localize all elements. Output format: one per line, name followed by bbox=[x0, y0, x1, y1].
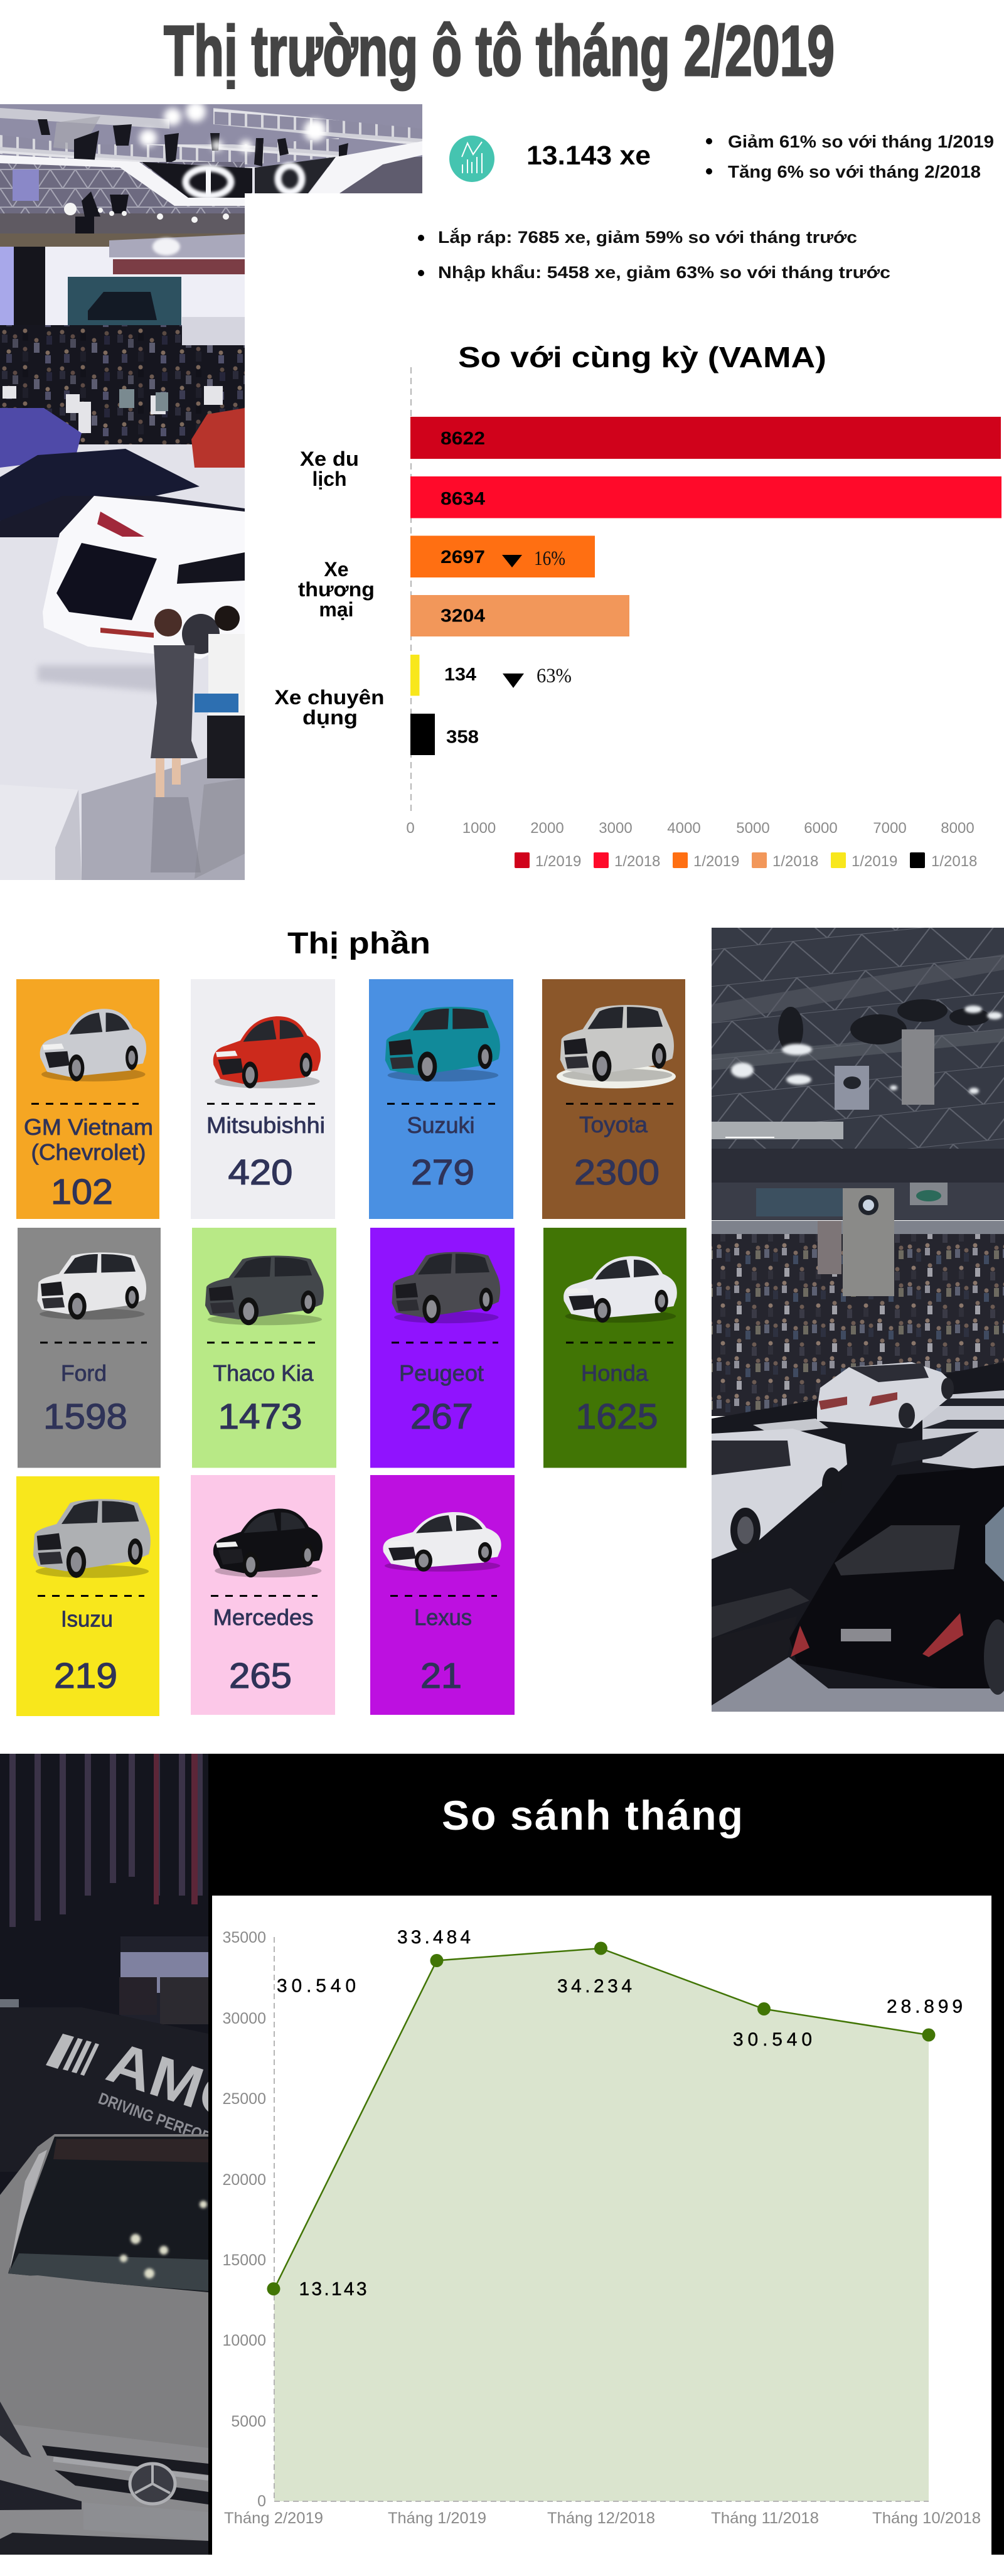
card: GM Vietnam: (Chevrolet) bbox=[31, 1139, 146, 1165]
heading: year on year: So với cùng kỳ (VAMA) bbox=[458, 341, 826, 373]
category label: special purpose: dụng bbox=[302, 706, 358, 729]
photo: AMG Mercedes on display bbox=[0, 1754, 208, 2555]
card: GM Vietnam: GM Vietnam bbox=[24, 1114, 153, 1140]
data labels: 33.484 bbox=[397, 1927, 471, 1948]
card: Lexus: Lexus bbox=[414, 1604, 472, 1630]
card: Peugeot: Peugeot bbox=[399, 1360, 484, 1386]
card: GM Vietnam bbox=[16, 979, 159, 1219]
card: Peugeot: 267 bbox=[410, 1397, 473, 1437]
data labels: 30.540 bbox=[733, 2029, 812, 2050]
filled area bbox=[274, 1948, 929, 2501]
card: Thaco Kia bbox=[192, 1228, 336, 1468]
bar: passenger 2018 bbox=[410, 476, 1001, 518]
line with markers bbox=[267, 1942, 935, 2295]
card: Mercedes: Mercedes bbox=[213, 1604, 314, 1630]
legend: 1/2019 bbox=[693, 853, 739, 870]
data labels: 28.899 bbox=[887, 1996, 963, 2017]
legend: 1/2018 bbox=[614, 853, 660, 870]
card: Honda bbox=[543, 1228, 686, 1468]
panel: black monthly comparison background bbox=[208, 1754, 1004, 2555]
card: Suzuki: Suzuki bbox=[407, 1112, 474, 1138]
x axis labels: Tháng 12/2018 bbox=[547, 2509, 655, 2527]
bullet list: month comparison: Giảm 61% so với tháng 1/2019 bbox=[728, 132, 994, 151]
data labels: 13.143 bbox=[299, 2278, 366, 2300]
bar: commercial 2018 bbox=[410, 595, 629, 636]
card: Suzuki: 279 bbox=[411, 1152, 474, 1193]
y axis labels: 0 bbox=[257, 2493, 266, 2510]
photo: AMG Mercedes on display: DRIVING PERFORMANCE bbox=[96, 2088, 262, 2164]
card: Thaco Kia: Thaco Kia bbox=[213, 1360, 314, 1386]
data labels: 34.234 bbox=[557, 1976, 632, 1997]
x axis labels: 0 bbox=[406, 820, 415, 837]
card: Isuzu bbox=[16, 1476, 159, 1716]
legend: 1/2018 bbox=[931, 853, 977, 870]
photo: auto show crowd with Audi booth bbox=[0, 102, 422, 880]
change marker: commercial -16%: 16% bbox=[534, 547, 565, 570]
card: Lexus bbox=[370, 1475, 515, 1715]
area chart: monthly sales bbox=[222, 1927, 981, 2527]
category label: commercial: Xe bbox=[324, 558, 349, 581]
card: Isuzu: Isuzu bbox=[61, 1606, 113, 1632]
y axis labels: 15000 bbox=[222, 2251, 266, 2269]
category label: passenger bbox=[300, 448, 359, 490]
bullet list: assembled and imported: Nhập khẩu: 5458 xe, giảm 63% so với tháng trước bbox=[438, 263, 890, 282]
x axis labels: 2000 bbox=[530, 820, 564, 837]
card: Peugeot bbox=[370, 1228, 515, 1468]
card: Lexus: 21 bbox=[420, 1656, 462, 1696]
photo: darkened BMW and Mercedes show floor bbox=[712, 928, 1004, 1712]
card: Mercedes bbox=[191, 1475, 335, 1715]
heading: monthly comparison: So sánh tháng bbox=[442, 1792, 743, 1838]
bullet list: month comparison: Tăng 6% so với tháng 2/2018 bbox=[728, 162, 981, 181]
x axis labels bbox=[224, 2509, 981, 2527]
bullet list: assembled and imported: Lắp ráp: 7685 xe, giảm 59% so với tháng trước bbox=[438, 227, 857, 247]
card: Mitsubishi bbox=[191, 979, 335, 1219]
card: Mercedes: 265 bbox=[229, 1656, 292, 1696]
x axis labels: 4000 bbox=[667, 820, 701, 837]
x axis labels bbox=[406, 820, 975, 837]
y axis labels: 25000 bbox=[222, 2090, 266, 2108]
card: Toyota bbox=[542, 979, 685, 1219]
card: GM Vietnam: 102 bbox=[51, 1172, 113, 1212]
AMG banner logo bbox=[46, 2034, 208, 2112]
card: Honda: 1625 bbox=[576, 1397, 658, 1437]
change marker: special purpose -63%: 63% bbox=[537, 665, 572, 687]
bar: commercial 2019 bbox=[410, 536, 595, 577]
AMG banner logo: AMG bbox=[100, 2030, 257, 2135]
category label: commercial: thương bbox=[298, 578, 375, 601]
total vehicles figure: 13.143 xe bbox=[526, 141, 651, 171]
card: Ford bbox=[18, 1228, 161, 1468]
legend: 1/2019 bbox=[535, 853, 581, 870]
bar: commercial 2018: 3204 bbox=[441, 606, 485, 626]
bar: passenger 2018: 8634 bbox=[441, 489, 485, 509]
bar: passenger 2019: 8622 bbox=[441, 429, 485, 449]
x axis labels: 3000 bbox=[599, 820, 633, 837]
card: Toyota: Toyota bbox=[579, 1112, 648, 1137]
bar: special purpose 2018 bbox=[410, 714, 479, 755]
x axis labels: 7000 bbox=[873, 820, 907, 837]
icon: teal chart circle bbox=[449, 136, 494, 182]
card: Isuzu: 219 bbox=[54, 1656, 117, 1696]
category label: commercial bbox=[298, 558, 375, 621]
bar: special purpose 2018: 358 bbox=[446, 727, 479, 747]
card: Suzuki bbox=[369, 979, 513, 1219]
x axis labels: 1000 bbox=[462, 820, 496, 837]
x axis labels: 8000 bbox=[941, 820, 975, 837]
y axis labels: 20000 bbox=[222, 2171, 266, 2189]
bar: passenger 2019 bbox=[410, 417, 1001, 459]
card: Honda: Honda bbox=[581, 1360, 649, 1386]
legend: 1/2018 bbox=[772, 853, 818, 870]
card: Toyota: 2300 bbox=[574, 1152, 660, 1193]
bar: special purpose 2019: 134 bbox=[444, 665, 476, 685]
y axis labels: 35000 bbox=[222, 1929, 266, 1946]
legend bbox=[515, 852, 977, 870]
legend: 1/2019 bbox=[852, 853, 897, 870]
card: Ford: 1598 bbox=[43, 1397, 127, 1437]
card: Thaco Kia: 1473 bbox=[218, 1397, 302, 1437]
panel: line chart card bbox=[212, 1896, 991, 2556]
y axis labels bbox=[222, 1929, 266, 2510]
category label: passenger: lịch bbox=[312, 468, 347, 490]
x axis labels: Tháng 10/2018 bbox=[872, 2509, 981, 2527]
category label: commercial: mại bbox=[319, 598, 354, 621]
x axis labels: Tháng 2/2019 bbox=[224, 2509, 323, 2527]
y axis labels: 5000 bbox=[231, 2413, 266, 2430]
y axis labels: 10000 bbox=[222, 2332, 266, 2349]
change marker: special purpose -63% bbox=[503, 665, 572, 688]
bar: special purpose 2019 bbox=[410, 655, 476, 695]
category label: special purpose bbox=[275, 686, 384, 729]
bar chart: year on year by vehicle type bbox=[275, 367, 1001, 870]
x axis labels: 6000 bbox=[804, 820, 838, 837]
y axis labels: 30000 bbox=[222, 2010, 266, 2027]
category label: passenger: Xe du bbox=[300, 448, 359, 470]
data labels: 30.540 bbox=[277, 1976, 356, 1996]
card: Ford: Ford bbox=[61, 1360, 107, 1386]
bar: commercial 2019: 2697 bbox=[441, 547, 485, 567]
data labels bbox=[277, 1927, 963, 2300]
bullet list: month comparison bbox=[706, 132, 994, 181]
category label: special purpose: Xe chuyên bbox=[275, 686, 384, 709]
x axis labels: 5000 bbox=[736, 820, 770, 837]
bullet list: assembled and imported bbox=[418, 227, 890, 282]
heading: market share: Thị phần bbox=[287, 927, 430, 960]
x axis labels: Tháng 1/2019 bbox=[388, 2509, 486, 2527]
change marker: commercial -16% bbox=[502, 547, 565, 570]
card: Mitsubishi: Mitsubishhi bbox=[206, 1112, 325, 1138]
x axis labels: Tháng 11/2018 bbox=[711, 2509, 819, 2527]
card: Mitsubishi: 420 bbox=[228, 1152, 292, 1193]
